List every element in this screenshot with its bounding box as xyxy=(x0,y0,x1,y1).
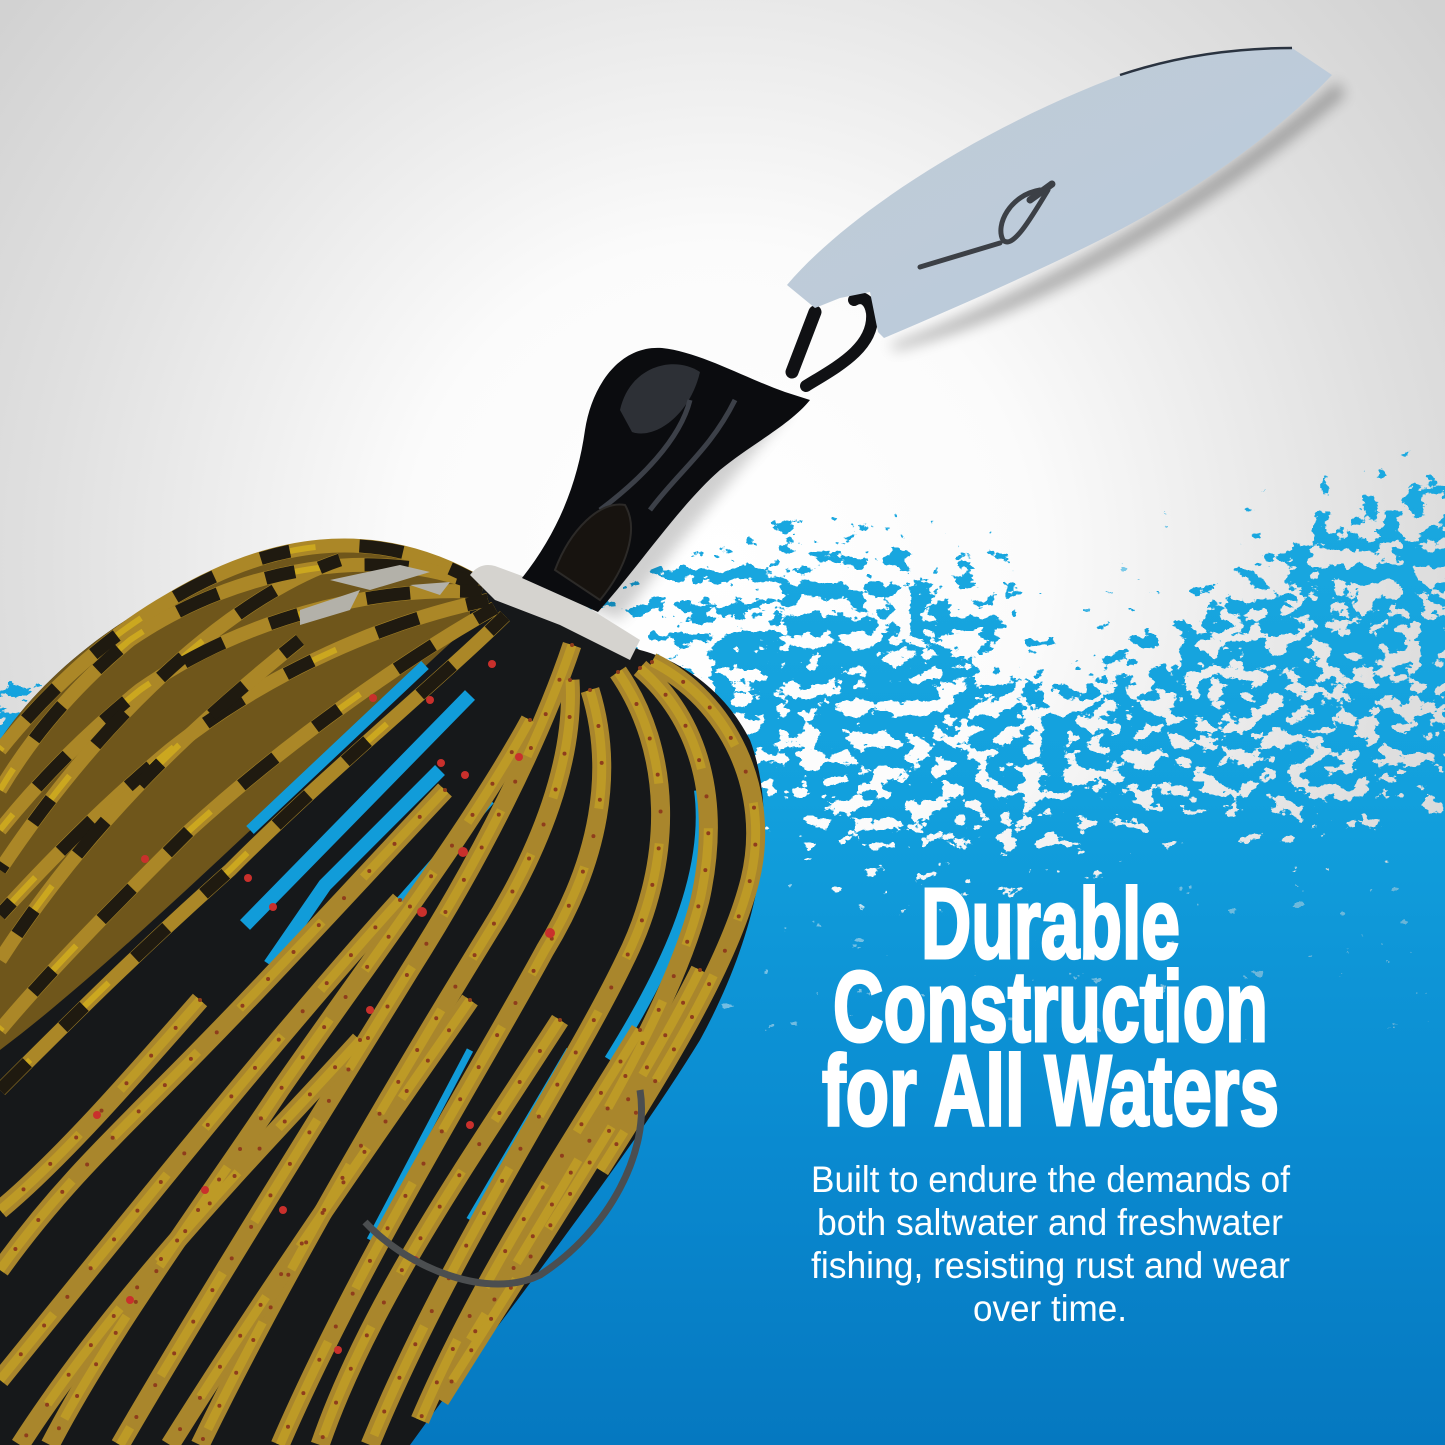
text block xyxy=(811,868,1291,1329)
title: Durable xyxy=(921,868,1180,980)
upper strand dark bars xyxy=(0,546,505,1090)
head eye highlight xyxy=(620,364,700,433)
body copy xyxy=(811,1159,1291,1329)
body copy: Built to endure the demands of xyxy=(811,1159,1291,1200)
body copy: fishing, resisting rust and wear xyxy=(811,1245,1290,1286)
skirt: silicone strands xyxy=(0,542,764,1445)
painted gill marks xyxy=(555,504,631,600)
upper strand yellow glints xyxy=(0,546,505,1090)
blade swivel eye xyxy=(920,184,1052,267)
water splash: blue painted area with splatter edge xyxy=(0,450,1445,1445)
blue gaps between strands xyxy=(245,665,702,1270)
jig head xyxy=(522,348,810,612)
skirt base mass xyxy=(0,542,764,1445)
blade top edge xyxy=(1120,48,1292,75)
title xyxy=(822,868,1279,1147)
title: Construction xyxy=(833,951,1268,1063)
spinner blade xyxy=(787,48,1345,350)
lower strand highlights xyxy=(0,645,756,1445)
collar band xyxy=(470,565,640,660)
head gloss lines xyxy=(600,400,735,510)
body copy: over time. xyxy=(973,1288,1127,1329)
lure drop shadow xyxy=(540,370,790,620)
red sparkle dots on black strands xyxy=(93,660,555,1354)
wire connector xyxy=(792,298,872,386)
lower tan strands xyxy=(0,645,756,1445)
upper-left tan strands xyxy=(0,546,505,1090)
red flecks on tan strands xyxy=(0,645,756,1445)
upper-left tan mass xyxy=(0,542,470,1050)
body copy: both saltwater and freshwater xyxy=(817,1202,1283,1243)
blade shadow xyxy=(890,82,1345,350)
hook xyxy=(365,1090,642,1284)
gaps of grey background in upper strands xyxy=(300,565,450,625)
